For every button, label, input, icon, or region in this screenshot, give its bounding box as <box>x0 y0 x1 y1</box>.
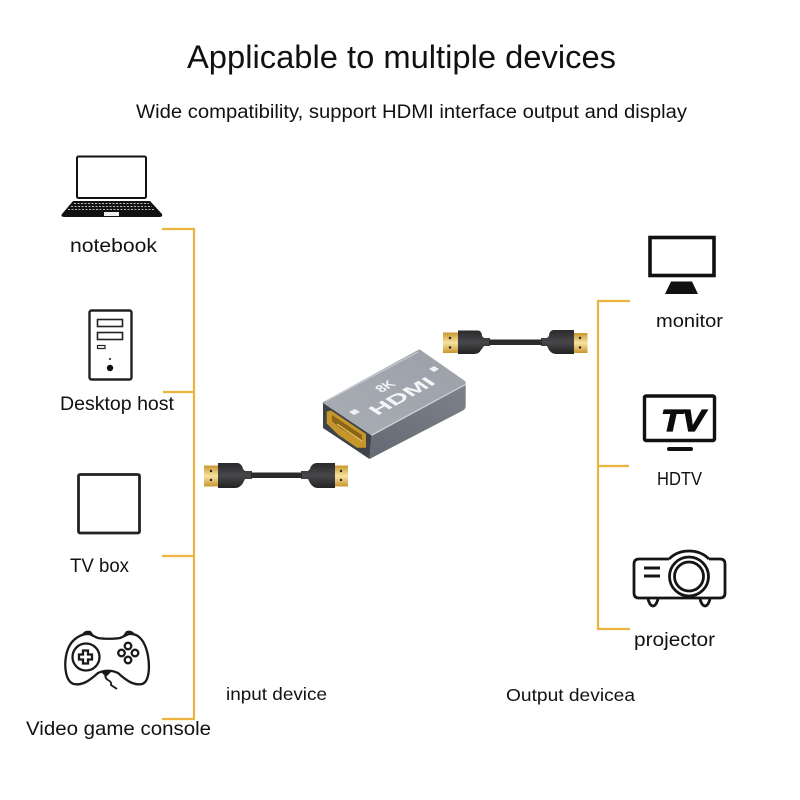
label: input device: input device <box>226 684 327 704</box>
subtitle: Wide compatibility, support HDMI interface output and display <box>136 102 688 123</box>
adapter top face <box>323 350 466 436</box>
input bracket lines <box>162 229 194 719</box>
icon: desktop host <box>90 310 132 380</box>
icon: TV: TV <box>661 403 708 438</box>
icon: game controller <box>65 632 149 689</box>
label: TV box: TV box <box>70 556 129 577</box>
icon: projector <box>634 551 725 606</box>
HDMI port <box>327 410 366 448</box>
label: desktop host: Desktop host <box>60 394 175 415</box>
label: output device: Output devicea <box>506 685 635 705</box>
HDMI cable bottom <box>204 463 348 488</box>
label: projector: projector <box>634 630 716 651</box>
icon: monitor <box>650 238 714 294</box>
label: video game console: Video game console <box>26 719 211 740</box>
icon: TV box <box>78 474 140 533</box>
label: monitor: monitor <box>656 311 723 331</box>
output bracket lines <box>598 301 630 629</box>
title: Applicable to multiple devices <box>187 39 616 75</box>
label: HDTV: HDTV <box>657 469 702 489</box>
adapter side face <box>370 385 466 459</box>
HDMI cable top <box>443 330 588 354</box>
HDMI adapter <box>323 350 466 459</box>
label: notebook: notebook <box>70 236 158 257</box>
icon: laptop <box>61 156 162 217</box>
adapter 8K marking: 8K <box>372 378 400 395</box>
adapter HDMI marking: HDMI <box>364 375 441 418</box>
icon: TV <box>644 396 714 451</box>
adapter front face <box>323 403 372 459</box>
adapter arrow marks <box>349 366 439 415</box>
